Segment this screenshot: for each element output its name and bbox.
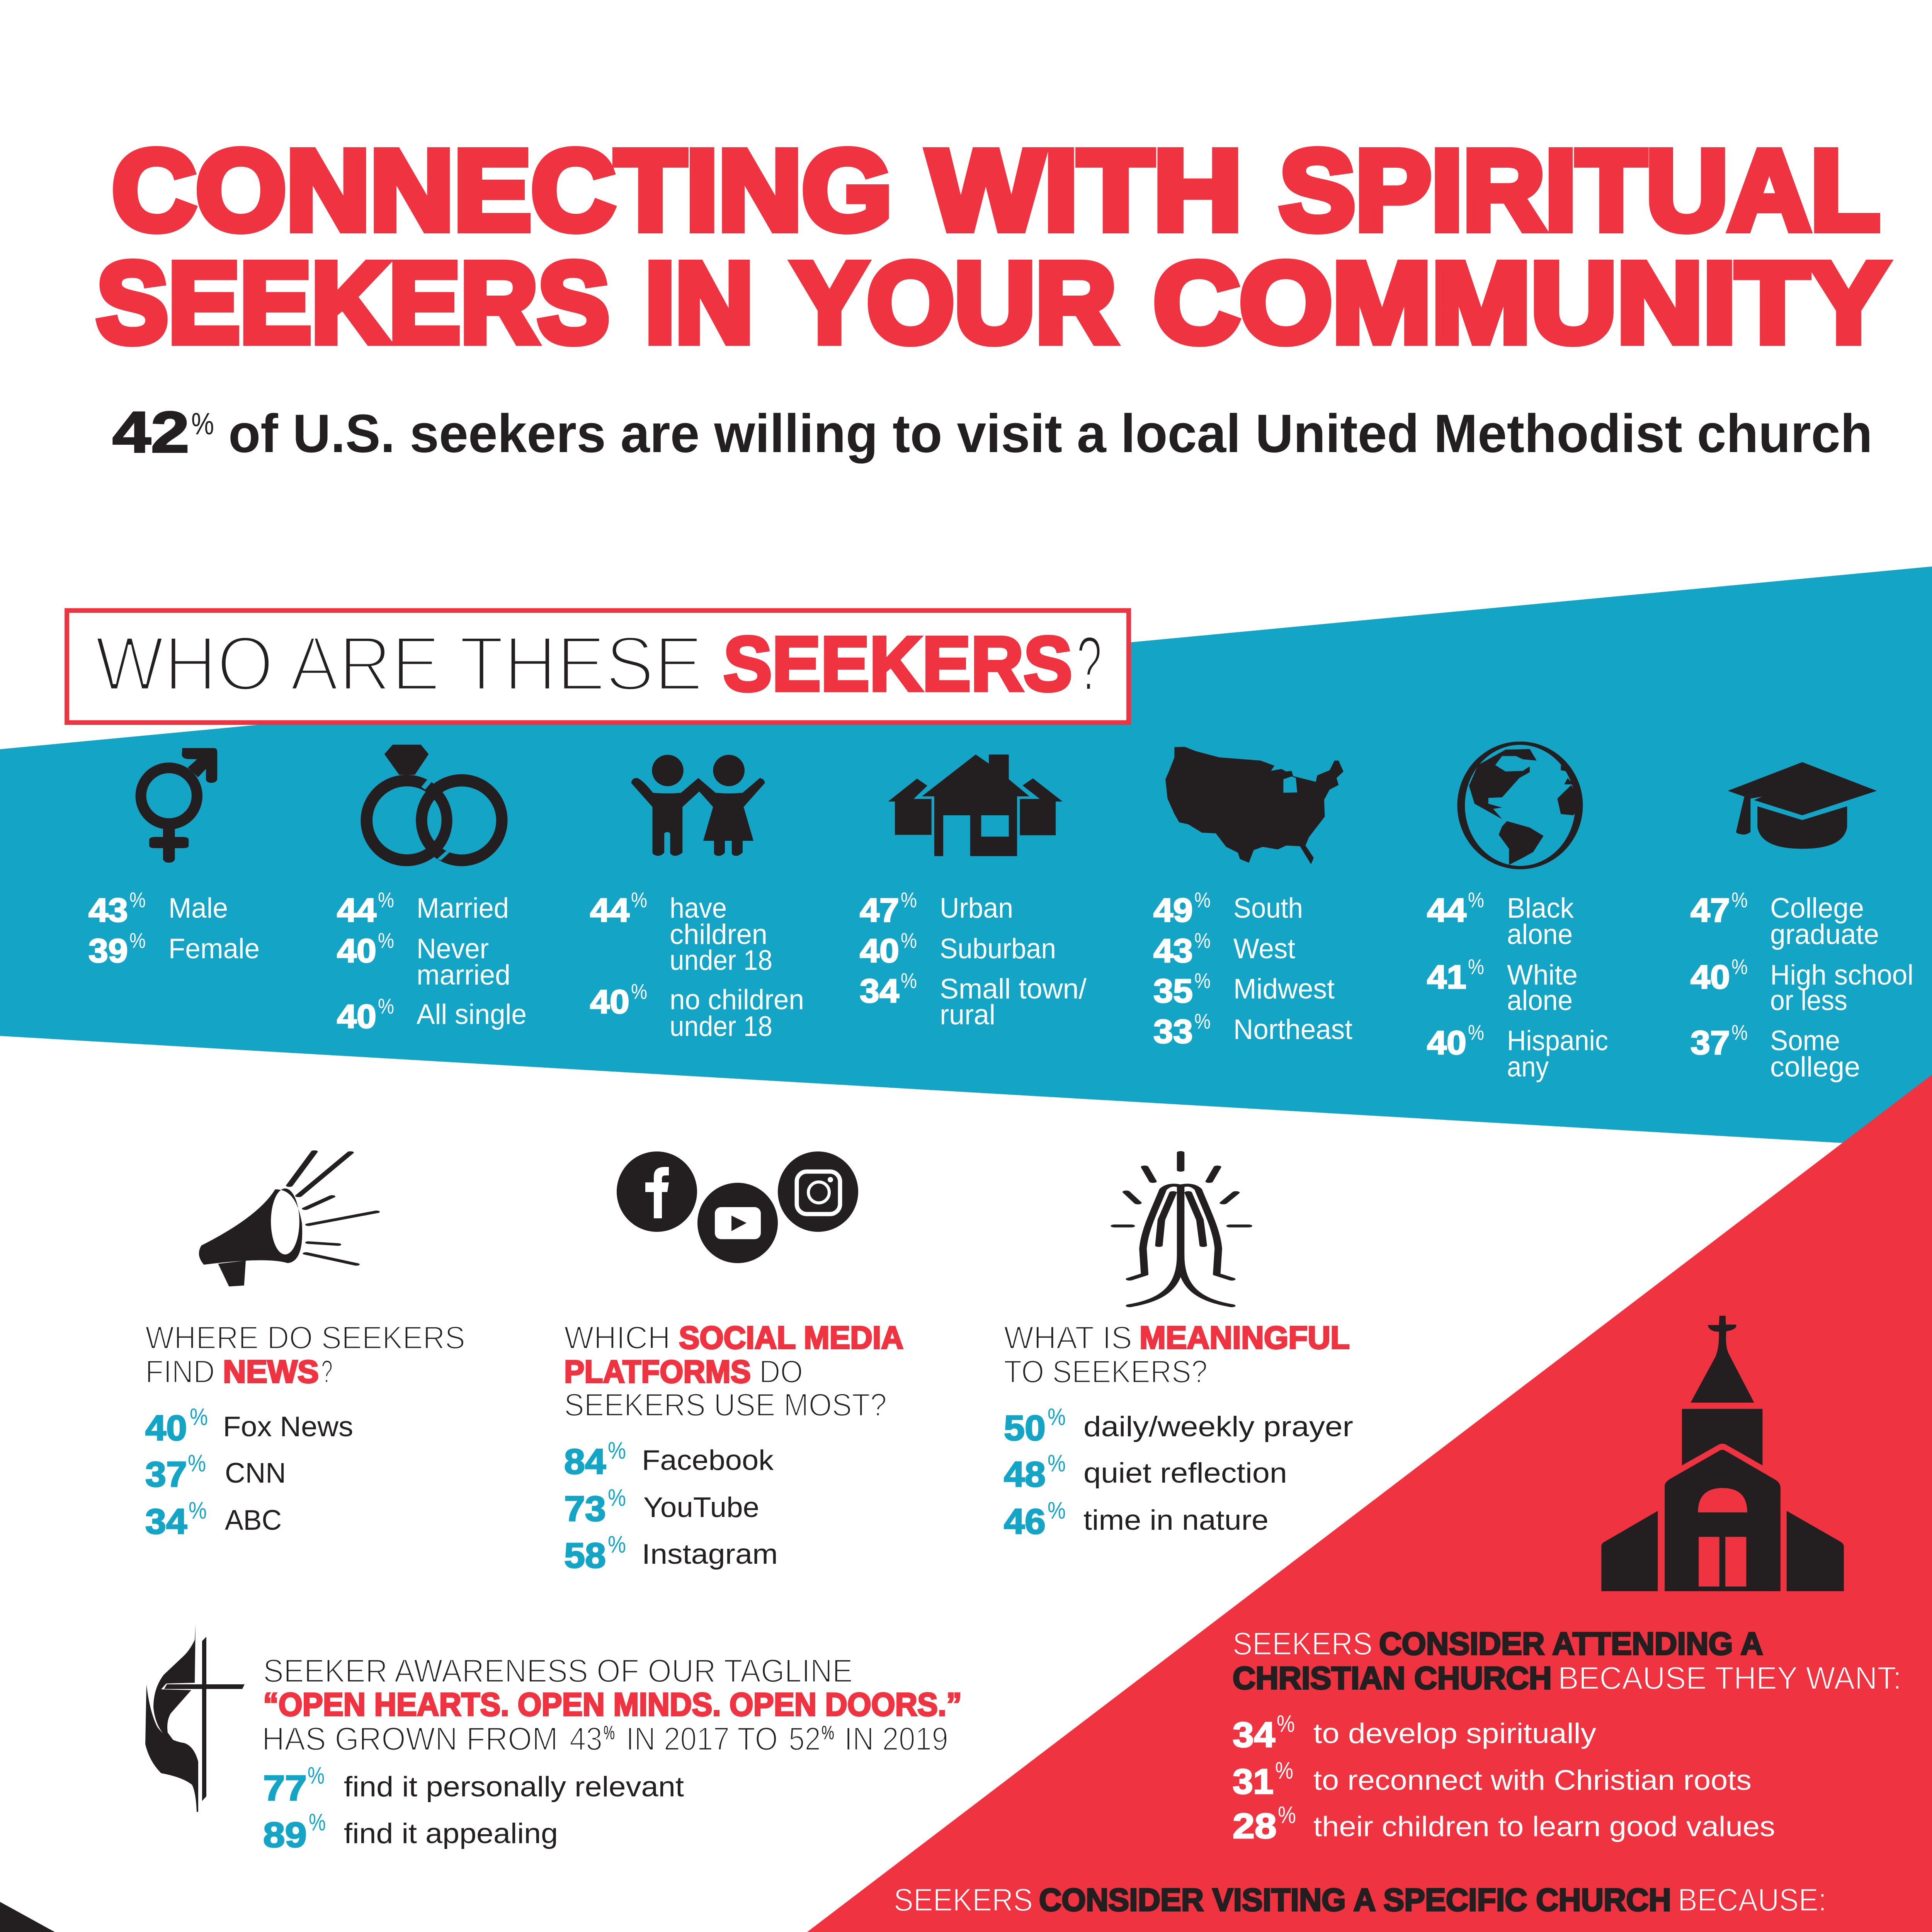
heading: what is meaningful — [1004, 1320, 1350, 1389]
icon: globe — [1457, 742, 1583, 869]
icon: gender symbol — [136, 748, 217, 863]
stat: never married: 40 — [337, 932, 376, 969]
stat: abc: 34 — [145, 1502, 187, 1541]
panel: news — [145, 1320, 465, 1541]
panel: gender stats — [88, 888, 260, 969]
title: SEEKERS — [97, 239, 609, 366]
stat: hispanic any: Hispanic — [1507, 1025, 1608, 1056]
stat: male: Male — [168, 893, 228, 924]
subtitle: % — [191, 406, 214, 441]
heading: which social media platforms: DO — [759, 1354, 803, 1389]
icon: praying hands — [1114, 1153, 1248, 1306]
subtitle: of U.S. seekers are willing to visit a local United Methodist church — [228, 403, 1872, 464]
stat: no children: 40 — [590, 983, 629, 1020]
stat: white alone: % — [1468, 954, 1484, 979]
stat: fox news: Fox News — [223, 1411, 353, 1442]
stat: never married: married — [417, 959, 510, 991]
stat: northeast — [1153, 1009, 1352, 1050]
stat: fox news: 40 — [145, 1408, 187, 1448]
stat: some college: college — [1770, 1051, 1860, 1083]
stat: quiet reflection — [1004, 1450, 1287, 1494]
stat: west: % — [1194, 928, 1211, 952]
stat: high school — [1690, 954, 1913, 1016]
stat: no children — [590, 979, 804, 1042]
stat: instagram: 58 — [564, 1536, 606, 1575]
stat: reconnect: % — [1275, 1757, 1293, 1784]
stat: personally relevant — [263, 1762, 684, 1808]
subtitle: 42 — [112, 400, 189, 464]
heading: which social media platforms: SEEKERS USE MOST? — [564, 1387, 887, 1423]
stat: children good values: % — [1278, 1802, 1296, 1828]
stat: some college: 37 — [1690, 1024, 1730, 1061]
stat: youtube: % — [608, 1485, 626, 1511]
icon: map of the United States — [1165, 747, 1344, 864]
title: IN — [645, 239, 753, 366]
panel: education stats — [1690, 888, 1913, 1083]
stat: facebook: % — [608, 1437, 626, 1464]
heading: tagline awareness: SEEKER AWARENESS OF OUR TAGLINE — [263, 1653, 853, 1689]
stat: never married: Never — [417, 933, 489, 964]
heading: consider attending: BECAUSE THEY WANT: — [1558, 1660, 1901, 1696]
heading: consider attending — [1233, 1626, 1901, 1696]
stat: facebook: Facebook — [642, 1445, 774, 1476]
stat: time in nature: time in nature — [1083, 1505, 1269, 1536]
stat: have children — [590, 888, 772, 976]
stat: never married: % — [378, 928, 394, 952]
heading: what is meaningful: WHAT IS — [1004, 1320, 1132, 1355]
stat: urban: % — [901, 888, 917, 912]
stat: suburban — [860, 928, 1056, 969]
stat: black alone: % — [1468, 888, 1484, 912]
stat: urban: Urban — [940, 893, 1013, 924]
stat: college graduate: 47 — [1690, 892, 1730, 929]
title: SPIRITUAL — [1279, 126, 1880, 254]
stat: married: 44 — [337, 892, 376, 929]
stat: hispanic any: % — [1468, 1020, 1484, 1044]
heading box: who are these seekers: SEEKERS — [723, 621, 1072, 707]
icon: church — [1601, 1316, 1844, 1591]
stat: college graduate: % — [1731, 888, 1748, 912]
stat: suburban: % — [901, 928, 917, 952]
stat: reconnect — [1233, 1757, 1752, 1801]
stat: west: West — [1233, 933, 1295, 964]
stat: no children: no children — [670, 984, 804, 1015]
heading: consider visiting: SEEKERS — [894, 1882, 1033, 1918]
heading: what is meaningful: MEANINGFUL — [1139, 1320, 1350, 1355]
stat: youtube — [564, 1485, 759, 1529]
stat: develop spiritually: 34 — [1233, 1715, 1275, 1755]
stat: personally relevant: % — [308, 1762, 325, 1789]
stat: facebook: 84 — [564, 1442, 606, 1481]
stat: urban: 47 — [860, 892, 899, 929]
stat: youtube: 73 — [564, 1489, 606, 1529]
icon: social media logos — [617, 1151, 858, 1263]
heading: tagline awareness: IN 2019 — [844, 1721, 948, 1757]
stat: appealing: find it appealing — [344, 1818, 558, 1849]
stat: time in nature: % — [1048, 1497, 1066, 1524]
stat: facebook — [564, 1437, 774, 1481]
stat: all single: % — [378, 994, 394, 1018]
stat: develop spiritually: % — [1277, 1711, 1295, 1737]
stat: fox news — [145, 1404, 353, 1448]
panel: community type stats — [860, 888, 1087, 1031]
heading: tagline awareness: % — [821, 1722, 834, 1743]
stat: male: % — [129, 888, 146, 912]
heading: tagline awareness: % — [604, 1722, 615, 1743]
icon: megaphone — [199, 1151, 376, 1286]
stat: northeast: % — [1194, 1009, 1211, 1033]
heading: where do seekers find news: NEWS — [223, 1354, 319, 1389]
heading: tagline awareness: 52 — [789, 1721, 821, 1757]
heading: tagline awareness: 43 — [570, 1721, 602, 1757]
stat: instagram — [564, 1531, 778, 1575]
stat: some college: % — [1731, 1020, 1748, 1044]
stat: college graduate: College — [1770, 893, 1864, 924]
stat: college graduate — [1690, 888, 1879, 950]
stat: quiet reflection: % — [1048, 1450, 1066, 1477]
panel: children stats — [590, 888, 804, 1042]
heading: tagline awareness: HAS GROWN FROM — [262, 1721, 558, 1757]
stat: develop spiritually — [1233, 1711, 1597, 1755]
title: CONNECTING — [112, 126, 892, 254]
stat: northeast: 33 — [1153, 1013, 1193, 1050]
stat: northeast: Northeast — [1233, 1014, 1352, 1045]
stat: personally relevant: 77 — [263, 1769, 307, 1808]
stat: appealing: % — [309, 1809, 326, 1836]
stat: time in nature: 46 — [1004, 1502, 1046, 1541]
stat: high school: High school — [1770, 959, 1913, 991]
stat: instagram: % — [608, 1531, 626, 1558]
heading: what is meaningful: TO SEEKERS? — [1004, 1354, 1208, 1389]
heading: consider visiting: CONSIDER VISITING A SPECIFIC CHURCH — [1039, 1882, 1671, 1918]
stat: instagram: Instagram — [642, 1539, 778, 1570]
stat: married — [337, 888, 509, 929]
icon: wedding rings — [361, 745, 508, 866]
heading: consider attending: CHRISTIAN CHURCH — [1233, 1660, 1552, 1696]
icon: two children — [631, 755, 765, 856]
stat: west: 43 — [1153, 932, 1193, 969]
stat: female: Female — [168, 933, 260, 964]
stat: black alone: Black — [1507, 893, 1574, 924]
stat: have children: children — [670, 919, 767, 950]
stat: no children: under 18 — [670, 1011, 772, 1042]
stat: quiet reflection: quiet reflection — [1083, 1458, 1287, 1489]
stat: personally relevant: find it personally relevant — [344, 1771, 684, 1803]
stat: midwest: Midwest — [1233, 973, 1335, 1005]
stat: appealing: 89 — [263, 1815, 307, 1855]
icon: cross and flame — [145, 1624, 245, 1812]
stat: children good values: 28 — [1233, 1806, 1277, 1846]
stat: cnn: % — [188, 1450, 206, 1477]
stat: hispanic any: 40 — [1427, 1024, 1466, 1061]
stat: small town: rural — [940, 999, 995, 1031]
stat: west — [1153, 928, 1295, 969]
background: teal band — [0, 561, 1932, 1143]
icon: graduation cap — [1728, 762, 1877, 849]
stat: some college: Some — [1770, 1025, 1840, 1056]
stat: south: South — [1233, 893, 1303, 924]
stat: have children: have — [670, 893, 727, 924]
stat: all single: All single — [417, 999, 527, 1030]
stat: prayer: 50 — [1004, 1408, 1046, 1448]
stat: college graduate: graduate — [1770, 919, 1879, 950]
panel: tagline awareness — [262, 1653, 962, 1855]
title: COMMUNITY — [1153, 239, 1888, 366]
stat: some college — [1690, 1020, 1860, 1083]
stat: black alone — [1427, 888, 1574, 950]
stat: abc: ABC — [225, 1505, 282, 1536]
stat: suburban: Suburban — [940, 933, 1056, 964]
stat: time in nature — [1004, 1497, 1269, 1541]
stat: south: 49 — [1153, 892, 1193, 929]
stat: hispanic any — [1427, 1020, 1608, 1083]
heading: where do seekers find news: WHERE DO SEEKERS — [145, 1320, 465, 1355]
stat: develop spiritually: to develop spiritually — [1313, 1718, 1597, 1749]
stat: prayer — [1004, 1404, 1353, 1448]
stat: hispanic any: any — [1507, 1051, 1549, 1083]
stat: small town: 34 — [860, 973, 899, 1010]
stat: midwest — [1153, 968, 1335, 1010]
stat: cnn: CNN — [225, 1458, 286, 1489]
heading: where do seekers find news — [145, 1320, 465, 1389]
heading: tagline awareness: “OPEN HEARTS. OPEN MINDS. OPEN DOORS.” — [263, 1686, 962, 1723]
stat: white alone: 41 — [1427, 959, 1466, 996]
stat: black alone: alone — [1507, 919, 1573, 950]
stat: small town: Small town/ — [940, 973, 1087, 1005]
stat: midwest: % — [1194, 968, 1211, 993]
stat: all single — [337, 994, 527, 1035]
title: WITH — [928, 126, 1242, 254]
background: black band — [0, 1902, 1205, 1932]
stat: abc — [145, 1497, 282, 1541]
stat: south: % — [1194, 888, 1211, 912]
heading: tagline awareness — [262, 1653, 962, 1757]
stat: reconnect: 31 — [1233, 1762, 1274, 1801]
stat: female — [88, 928, 260, 969]
heading: where do seekers find news: ? — [321, 1354, 333, 1389]
panel: consider attending a christian church — [1233, 1626, 1901, 1846]
heading: which social media platforms: PLATFORMS — [564, 1354, 751, 1389]
stat: high school: or less — [1770, 985, 1847, 1016]
heading: consider visiting — [894, 1882, 1827, 1918]
stat: high school: 40 — [1690, 959, 1730, 996]
heading: where do seekers find news: FIND — [145, 1354, 215, 1389]
stat: midwest: 35 — [1153, 973, 1193, 1010]
stat: appealing — [263, 1809, 558, 1855]
stat: have children: 44 — [590, 892, 629, 929]
stat: no children: % — [631, 979, 647, 1003]
heading: which social media platforms: SOCIAL MEDIA — [679, 1320, 903, 1355]
stat: urban — [860, 888, 1013, 929]
panel: consider visiting a specific church — [894, 1882, 1827, 1932]
stat: male: 43 — [88, 892, 128, 929]
heading: tagline awareness: IN 2017 TO — [626, 1721, 778, 1757]
panel: race stats — [1427, 888, 1608, 1083]
panel: social media — [564, 1320, 903, 1575]
stat: high school: % — [1731, 954, 1748, 979]
icon: houses — [888, 755, 1063, 856]
background: red band — [490, 1034, 1932, 1932]
stat: cnn — [145, 1450, 286, 1494]
stat: never married — [337, 928, 510, 991]
stat: suburban: 40 — [860, 932, 899, 969]
stat: abc: % — [189, 1497, 207, 1524]
panel: meaningful — [1004, 1320, 1353, 1541]
stat: south — [1153, 888, 1303, 929]
stat: prayer: daily/weekly prayer — [1083, 1411, 1353, 1442]
stat: cnn: 37 — [145, 1455, 187, 1494]
stat: white alone: alone — [1507, 985, 1573, 1016]
heading box: who are these seekers: ? — [1077, 621, 1102, 707]
stat: married: % — [378, 888, 394, 912]
stat: male — [88, 888, 228, 929]
stat: female: 39 — [88, 932, 128, 969]
stat: married: Married — [417, 893, 509, 924]
stat: black alone: 44 — [1427, 892, 1466, 929]
heading box: who are these seekers — [67, 611, 1129, 723]
stat: prayer: % — [1048, 1404, 1066, 1430]
heading: which social media platforms — [564, 1320, 903, 1423]
title — [97, 126, 1888, 366]
heading: which social media platforms: WHICH — [564, 1320, 670, 1355]
stat: small town: % — [901, 968, 917, 993]
stat: reconnect: to reconnect with Christian roots — [1313, 1765, 1752, 1796]
title: YOUR — [792, 239, 1116, 366]
stat: quiet reflection: 48 — [1004, 1455, 1046, 1494]
stat: fox news: % — [190, 1404, 208, 1430]
heading: consider attending: SEEKERS — [1233, 1626, 1372, 1662]
heading: consider attending: CONSIDER ATTENDING A — [1379, 1626, 1763, 1662]
stat: female: % — [129, 928, 146, 952]
heading box: who are these seekers: WHO ARE THESE — [95, 621, 703, 707]
stat: children good values — [1233, 1802, 1775, 1846]
stat: white alone — [1427, 954, 1578, 1016]
stat: youtube: YouTube — [643, 1492, 759, 1523]
stat: white alone: White — [1507, 959, 1578, 991]
stat: have children: % — [631, 888, 647, 912]
stat: small town — [860, 968, 1087, 1031]
panel: region stats — [1153, 888, 1352, 1050]
stat: children good values: their children to learn good values — [1313, 1811, 1775, 1842]
stat: all single: 40 — [337, 998, 376, 1035]
heading: consider visiting: BECAUSE: — [1678, 1882, 1827, 1918]
panel: marital status stats — [337, 888, 527, 1035]
stat: have children: under 18 — [670, 945, 772, 976]
